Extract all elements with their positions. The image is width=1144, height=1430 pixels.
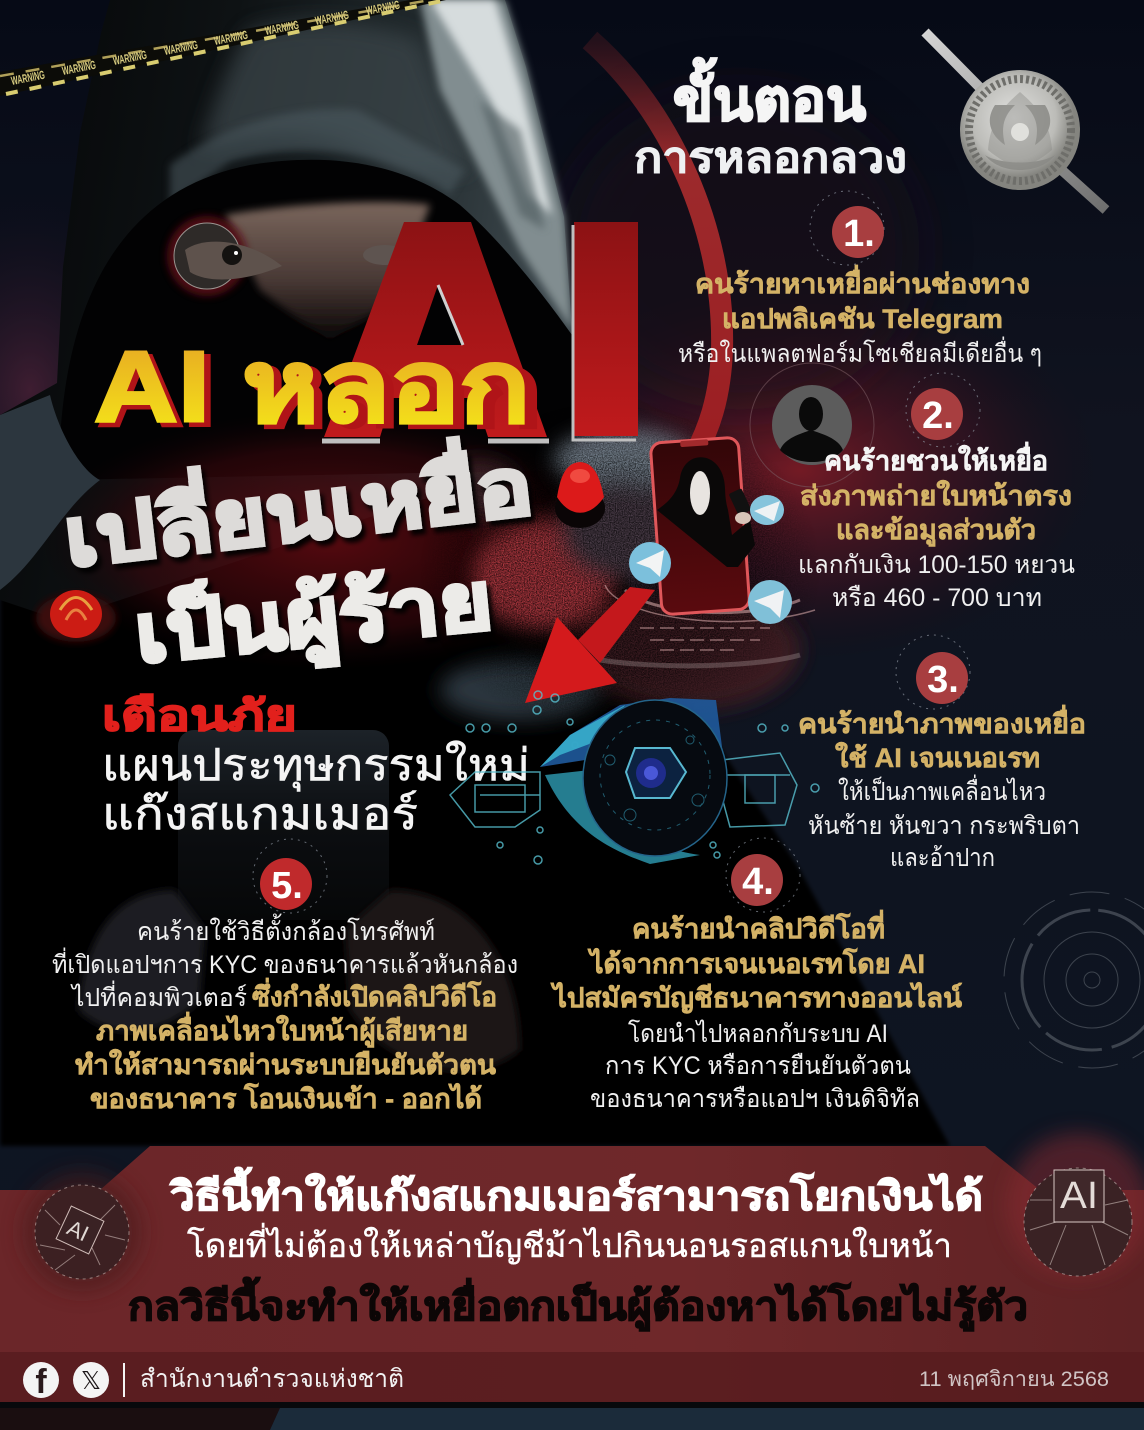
step 3: และอ้าปาก [890, 844, 995, 872]
headline: เปลี่ยนเหยื่อเป็นผู้ร้าย: เป็นผู้ร้าย [131, 552, 497, 685]
icon: telegram bubble 2 [750, 495, 784, 525]
step 3: หันซ้าย หันขวา กระพริบตา [808, 812, 1080, 840]
step 4: โดยนำไปหลอกกับระบบ AI [628, 1019, 888, 1048]
icon: X [73, 1362, 109, 1398]
icon: X: 𝕏 [81, 1367, 101, 1395]
torso [0, 430, 950, 1146]
step 3: ใช้ AI เจนเนอเรท [835, 742, 1040, 773]
headline: เปลี่ยนเหยื่อเป็นผู้ร้าย [58, 429, 537, 685]
badge 3: 3. [927, 659, 959, 701]
badge 2: 2. [922, 395, 954, 437]
warning heading text: แก๊งสแกมเมอร์ [102, 790, 418, 839]
hooded figure [0, 0, 950, 1146]
heading: ขั้นตอน การหลอกลวง: ขั้นตอน [673, 58, 866, 133]
icon: AI sphere right [1006, 1133, 1144, 1277]
red arc [590, 40, 722, 455]
badge 1 [810, 191, 884, 265]
banner: conclusion: โดยที่ไม่ต้องให้เหล่าบัญชีม้าไปกินนอนรอสแกนใบหน้า [187, 1223, 952, 1264]
icon: cyber eye [167, 216, 282, 296]
icon: facebook: f [35, 1363, 47, 1401]
step 2: และข้อมูลส่วนตัว [836, 515, 1036, 547]
step 5: ซึ่งกำลังเปิดคลิปวิดีโอ [252, 977, 497, 1012]
step 2: ส่งภาพถ่ายใบหน้าตรง [800, 480, 1072, 511]
hacker figure [657, 457, 755, 567]
CCTV camera [450, 691, 819, 864]
heading: ขั้นตอน การหลอกลวง: การหลอกลวง [634, 134, 907, 181]
step 4 [550, 838, 963, 1113]
step 5: ไปที่คอมพิวเตอร์ [70, 980, 247, 1012]
step 1 [678, 191, 1042, 368]
warning heading text: เตือนภัย [102, 692, 297, 739]
headline: เปลี่ยนเหยื่อเป็นผู้ร้าย: เปลี่ยนเหยื่อ [58, 429, 537, 583]
icon: AI sphere right: AI [1060, 1175, 1098, 1217]
heading: ขั้นตอน การหลอกลวง [634, 58, 907, 181]
step 4: ได้จากการเจนเนอเรทโดย AI [587, 947, 925, 979]
warning tape: WARNING [314, 8, 350, 28]
badge 5: 5. [271, 865, 303, 907]
red arrow [525, 587, 655, 703]
step 1: คนร้ายหาเหยื่อผ่านช่องทาง [695, 264, 1030, 299]
icon: red siren right [555, 462, 605, 528]
step 2: หรือ 460 - 700 บาท [832, 584, 1042, 612]
warning heading text [102, 692, 530, 839]
step 4: คนร้ายนำคลิปวิดีโอที่ [632, 909, 885, 944]
headline: AI หลอก: AI หลอก [94, 331, 530, 443]
step 2: คนร้ายชวนให้เหยื่อ [824, 441, 1048, 476]
step 4: ไปสมัครบัญชีธนาคารทางออนไลน์ [550, 982, 963, 1014]
step 4: การ KYC หรือการยืนยันตัวตน [605, 1052, 911, 1080]
warning tape: WARNING [112, 48, 148, 68]
footer strip: 11 พฤศจิกายน 2568 [919, 1368, 1109, 1391]
warning tape: WARNING [10, 68, 46, 88]
step 5 [52, 839, 518, 1114]
warning tape: WARNING [213, 28, 249, 48]
banner: conclusion: กลวิธีนี้จะทำให้เหยื่อตกเป็นผู้ต้องหาได้โดยไม่รู้ตัว [128, 1277, 1028, 1331]
step 2: แลกกับเงิน 100-150 หยวน [798, 551, 1075, 579]
step 1: หรือในแพลตฟอร์มโซเชียลมีเดียอื่น ๆ [678, 336, 1042, 368]
step 3: ให้เป็นภาพเคลื่อนไหว [838, 774, 1046, 806]
step 2 [798, 373, 1075, 612]
warning tape [0, 0, 446, 96]
textured chest with red glow [432, 418, 807, 731]
warning tape: WARNING [264, 18, 300, 38]
warning tape: WARNING [61, 58, 97, 78]
icon: AI sphere left [22, 1172, 142, 1292]
icon: red siren left [36, 590, 116, 642]
headline: AI หลอก: AI หลอก [98, 335, 542, 447]
step 3 [798, 635, 1086, 872]
step 5: ของธนาคาร โอนเงินเข้า - ออกได้ [90, 1082, 482, 1114]
radar platform [600, 585, 815, 666]
warning heading text: แผนประทุษกรรมใหม่ [102, 740, 530, 792]
step 3: คนร้ายนำภาพของเหยื่อ [798, 704, 1086, 739]
icon: AI sphere left: AI [63, 1215, 93, 1246]
warning tape: WARNING [163, 38, 199, 58]
step 5: คนร้ายใช้วิธีตั้งกล้องโทรศัพท์ [137, 913, 435, 946]
phone held in hands [78, 730, 520, 1071]
emblem: police staff and shield [925, 32, 1106, 210]
tech ring background decoration [1004, 892, 1144, 1068]
icon: telegram bubble 3 [748, 580, 792, 624]
badge 1: 1. [843, 213, 875, 255]
badge 2 [906, 373, 980, 447]
footer strip: สำนักงานตำรวจแห่งชาติ [140, 1365, 404, 1393]
step 5: ภาพเคลื่อนไหวใบหน้าผู้เสียหาย [96, 1011, 468, 1048]
step 4: ของธนาคารหรือแอปฯ เงินดิจิทัล [590, 1085, 920, 1113]
icon: victim silhouette [750, 363, 874, 487]
banner: conclusion [0, 1146, 1144, 1402]
step 1: แอปพลิเคชัน Telegram [722, 304, 1003, 334]
badge 5 [253, 839, 327, 913]
badge 3 [896, 635, 970, 709]
badge 4 [726, 838, 800, 912]
icon: facebook [23, 1362, 59, 1401]
badge 4: 4. [742, 861, 774, 903]
icon: telegram bubble 1 [629, 542, 671, 584]
step 5: ที่เปิดแอปฯการ KYC ของธนาคารแล้วหันกล้อง [52, 947, 518, 979]
phone with hacker [629, 437, 792, 624]
big red AI letters [322, 222, 638, 441]
footer strip [0, 1352, 1144, 1430]
step 5: ทำให้สามารถผ่านระบบยืนยันตัวตน [75, 1049, 497, 1080]
banner: conclusion: วิธีนี้ทำให้แก๊งสแกมเมอร์สามารถโยกเงินได้ [169, 1167, 983, 1219]
